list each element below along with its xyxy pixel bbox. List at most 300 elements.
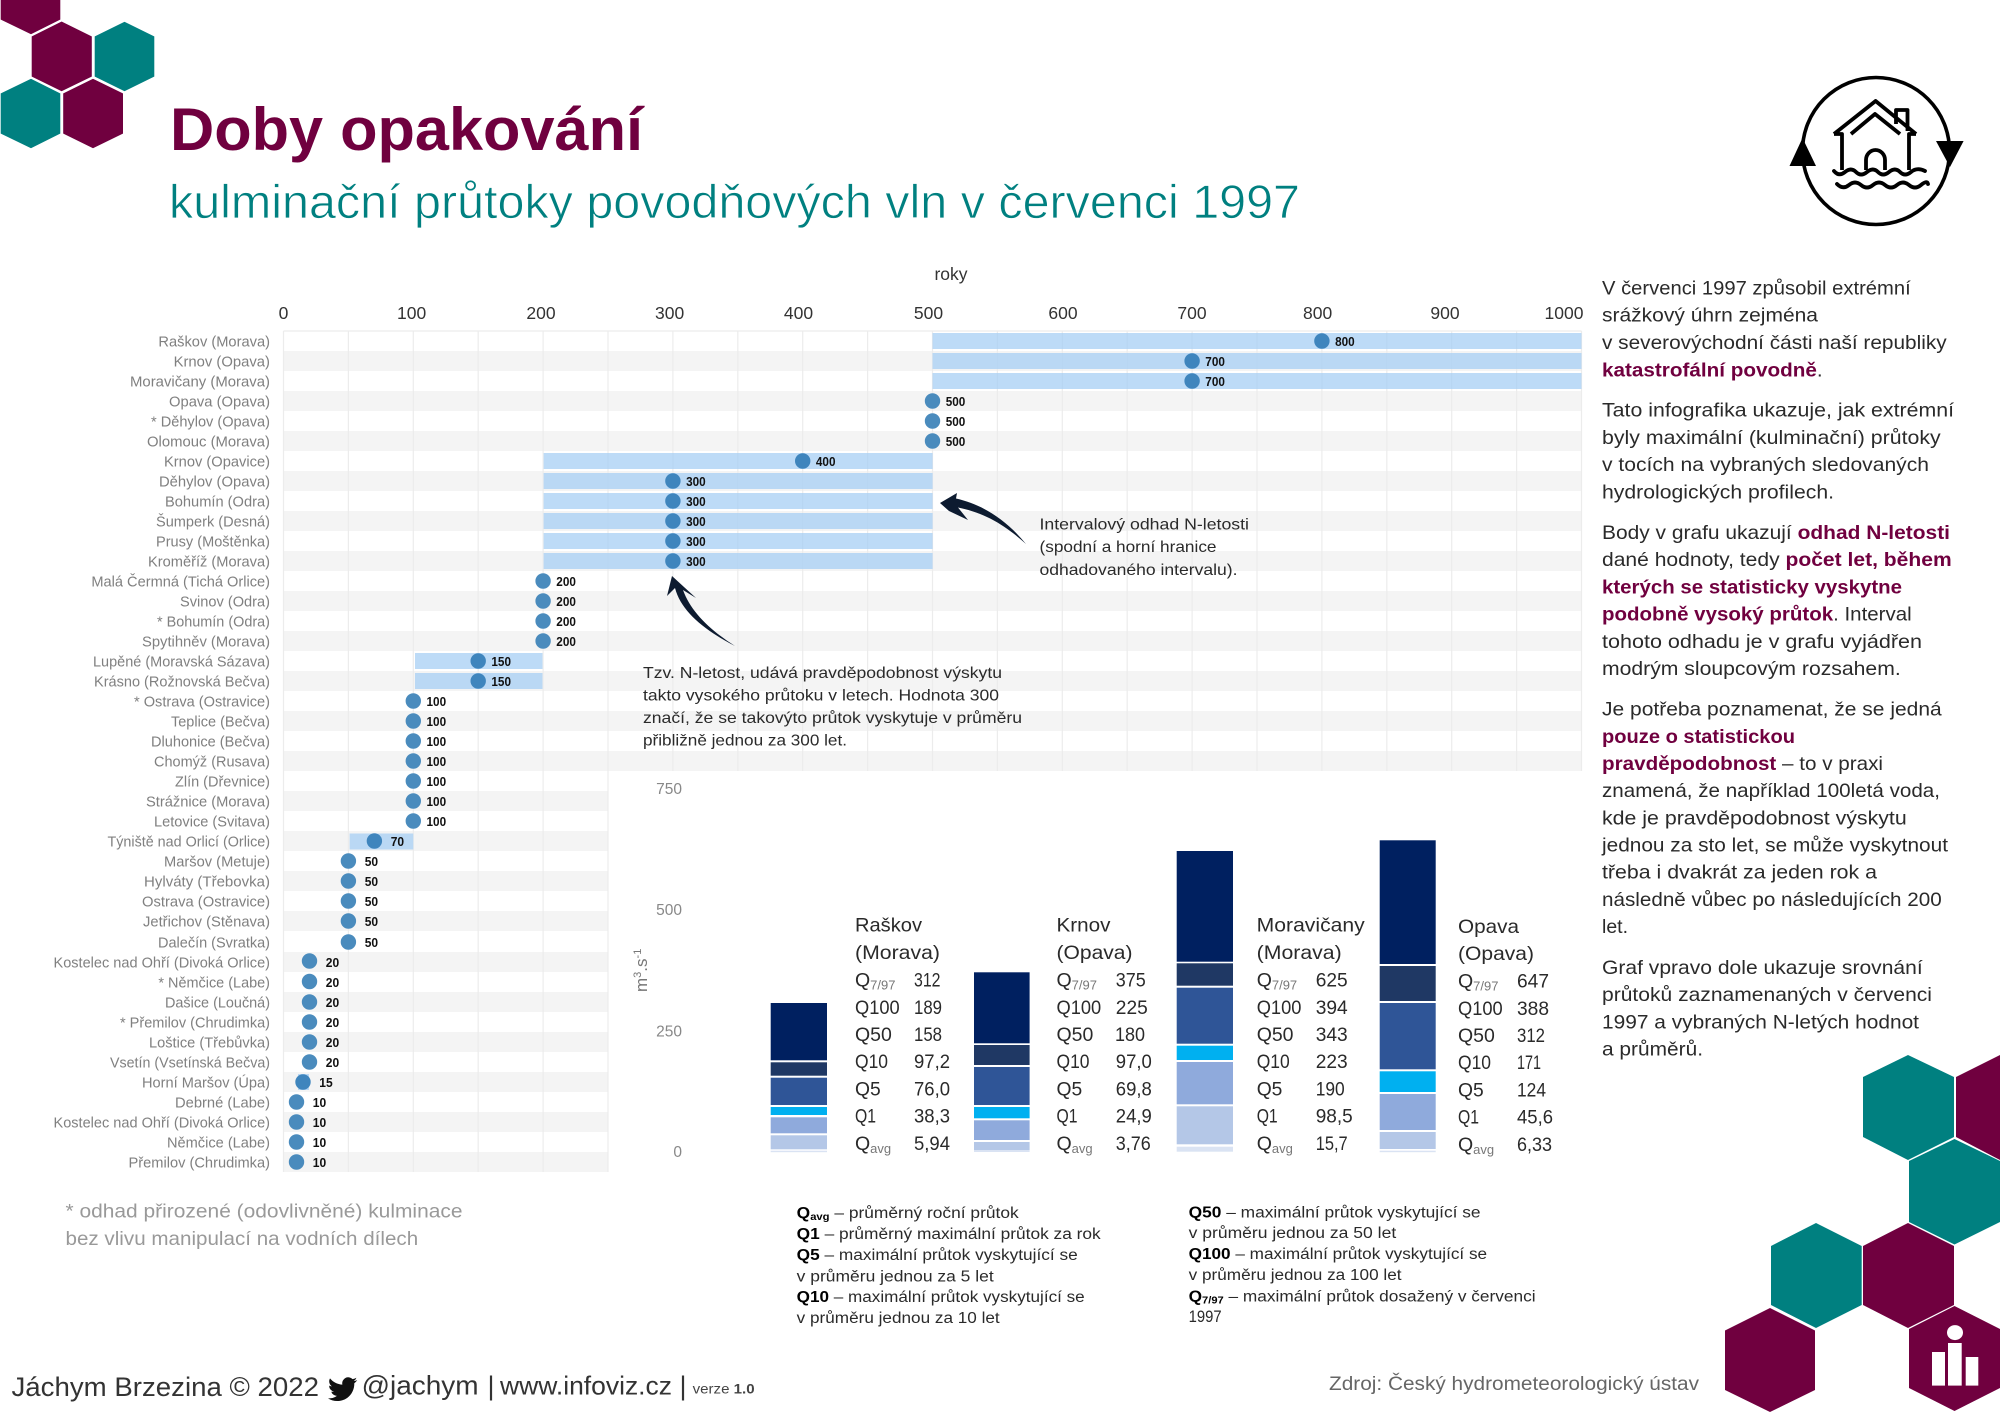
footnote: bez vlivu manipulací na vodních dílech — [66, 1228, 418, 1250]
row: Kostelec nad Ohří (Divoká Orlice): Kostelec nad Ohří (Divoká Orlice) — [54, 956, 270, 972]
row: Teplice (Bečva): Teplice (Bečva) — [171, 714, 270, 730]
row: Vsetín (Vsetínská Bečva): 20 — [326, 1056, 339, 1070]
row: Svinov (Odra): 200 — [556, 595, 576, 609]
row: Vsetín (Vsetínská Bečva) — [110, 1054, 339, 1072]
row: Malá Čermná (Tichá Orlice): Malá Čermná (Tichá Orlice) — [91, 574, 270, 590]
row: Krásno (Rožnovská Bečva): Krásno (Rožnovská Bečva) — [94, 674, 270, 690]
row: * Ostrava (Ostravice) — [134, 693, 446, 710]
paragraph 3: podobně vysoký průtok . Interval — [1602, 604, 1912, 626]
legend: left column: v průměru jednou za 5 let — [797, 1268, 994, 1286]
table: Moravičany values: 625 — [1316, 970, 1348, 992]
annotation: interval estimate: Intervalový odhad N-letosti — [1040, 516, 1249, 534]
table: Opava values: 6,33 — [1517, 1134, 1552, 1156]
table: Raškov values: (Morava) — [855, 942, 940, 964]
row: Týniště nad Orlicí (Orlice): 70 — [391, 835, 404, 849]
row: Bohumín (Odra): Bohumín (Odra) — [165, 494, 270, 510]
row: Strážnice (Morava): Strážnice (Morava) — [146, 794, 270, 810]
table: Raškov values: Q — [855, 1133, 870, 1155]
axis ticks: 500 — [914, 303, 943, 323]
table: Opava values: Q50 — [1458, 1025, 1495, 1047]
axis ticks: 200 — [526, 303, 556, 323]
row: Opava (Opava) — [169, 393, 965, 410]
table: Krnov values: 69,8 — [1116, 1078, 1152, 1100]
row: Dluhonice (Bečva): 100 — [426, 735, 446, 749]
row: Teplice (Bečva): 100 — [426, 715, 446, 729]
row: Přemilov (Chrudimka): 10 — [313, 1156, 326, 1170]
paragraph 4: třeba i dvakrát za jeden rok a — [1602, 862, 1877, 884]
row: Bohumín (Odra) — [165, 493, 933, 510]
chart: stacked bars y axis: 0 — [673, 1144, 682, 1161]
footer: author: verze 1.0 — [693, 1380, 755, 1396]
row: Loštice (Třebůvka) — [149, 1034, 339, 1052]
row: Moravičany (Morava): Moravičany (Morava) — [130, 374, 270, 390]
row: Dašice (Loučná): Dašice (Loučná) — [165, 996, 270, 1012]
row: Děhylov (Opava) — [159, 473, 933, 490]
text block: side explanation — [1601, 277, 1955, 1060]
row: Kostelec nad Ohří (Divoká Orlice): 10 — [313, 1116, 326, 1130]
paragraph 2: byly maximální (kulminační) průtoky — [1602, 427, 1941, 449]
row: Spytihněv (Morava): 200 — [556, 635, 576, 649]
row: Malá Čermná (Tichá Orlice): 200 — [556, 575, 576, 589]
axis unit: m — [632, 978, 651, 992]
row: Kroměříž (Morava): Kroměříž (Morava) — [148, 554, 270, 570]
row: Šumperk (Desná) — [156, 513, 933, 530]
paragraph 3: Body v grafu ukazují odhad N-letosti — [1602, 522, 1950, 544]
axis ticks: 100 — [397, 303, 426, 323]
axis ticks: 800 — [1303, 303, 1332, 323]
row: Horní Maršov (Úpa): 15 — [319, 1076, 333, 1090]
row: Prusy (Moštěnka) — [156, 533, 933, 550]
row: Svinov (Odra) — [180, 593, 576, 610]
footer: author: www.infoviz.cz — [499, 1370, 672, 1400]
table: Raškov values: 5,94 — [914, 1133, 950, 1155]
decoration: hexagons top left — [0, 0, 155, 149]
table: Opava values: Opava — [1458, 916, 1519, 938]
row: Jetřichov (Stěnava) — [143, 913, 378, 930]
footer: source: Zdroj: Český hydrometeorologický ústav — [1329, 1373, 1700, 1395]
row: Dašice (Loučná): 20 — [326, 996, 339, 1010]
paragraph 1: v severovýchodní části naší republiky — [1602, 332, 1947, 354]
row: * Němčice (Labe): * Němčice (Labe) — [158, 976, 270, 992]
row: Šumperk (Desná): 300 — [686, 515, 706, 529]
table: Raškov values: avg — [870, 1141, 891, 1156]
row: Kostelec nad Ohří (Divoká Orlice): 20 — [326, 956, 339, 970]
legend: left column: – průměrný roční průtok — [830, 1205, 1019, 1222]
axis unit: -1 — [632, 949, 644, 958]
table: Moravičany values: 190 — [1316, 1078, 1345, 1100]
row: * Děhylov (Opava): 500 — [946, 415, 965, 429]
table: Opava values: 312 — [1517, 1025, 1545, 1047]
row: Krnov (Opava): Krnov (Opava) — [174, 354, 270, 370]
row: * Bohumín (Odra): * Bohumín (Odra) — [157, 614, 270, 630]
stacked bar: Krnov — [974, 972, 1030, 1152]
row: Prusy (Moštěnka): Prusy (Moštěnka) — [156, 534, 270, 550]
legend: right column: Q50 – maximální průtok vyskytující se — [1189, 1204, 1481, 1222]
paragraph 4: znamená, že například 100letá voda, — [1602, 780, 1940, 802]
table: Opava values: 171 — [1517, 1052, 1541, 1074]
table: Krnov values: 225 — [1116, 997, 1148, 1019]
row: Spytihněv (Morava) — [142, 633, 576, 650]
table: Raškov values: Q — [855, 970, 870, 992]
row: * Děhylov (Opava) — [151, 413, 965, 430]
row: Moravičany (Morava) — [130, 373, 1582, 390]
row: Olomouc (Morava) — [147, 433, 965, 450]
legend: right column: 1997 — [1189, 1308, 1222, 1326]
legend: left column: Q1 – průměrný maximální průtok za rok — [797, 1226, 1101, 1243]
row: Strážnice (Morava) — [146, 793, 446, 810]
row: Strážnice (Morava): 100 — [426, 795, 446, 809]
legend: left column — [797, 1205, 1101, 1327]
row: Zlín (Dřevnice): 100 — [426, 775, 446, 789]
row: Chomýž (Rusava) — [154, 753, 446, 770]
row: Moravičany (Morava): 700 — [1205, 375, 1225, 389]
axis ticks: 600 — [1048, 303, 1078, 323]
footer: author: | — [488, 1371, 495, 1401]
footer: author: | — [680, 1371, 687, 1401]
row: Hylváty (Třebovka) — [144, 873, 378, 890]
table: Moravičany values: Q — [1257, 970, 1272, 992]
table: Moravičany values: Q5 — [1257, 1078, 1283, 1100]
table: Raškov values: 189 — [914, 997, 942, 1019]
table: Opava values: Q5 — [1458, 1080, 1484, 1102]
legend: left column: Q5 – maximální průtok vyskytující se — [797, 1247, 1078, 1264]
row: Opava (Opava): 500 — [946, 395, 965, 409]
annotation: N-year explanation: přibližně jednou za 300 let. — [643, 732, 847, 750]
row: Debrné (Labe): 10 — [313, 1096, 326, 1110]
table: Moravičany values — [1257, 915, 1365, 1156]
row: Děhylov (Opava): 300 — [686, 475, 706, 489]
legend: right column: 7/97 — [1202, 1296, 1224, 1306]
paragraph 5 — [1602, 957, 1932, 1060]
table: Krnov values: 180 — [1115, 1024, 1145, 1046]
paragraph 2: hydrologických profilech. — [1602, 481, 1834, 503]
paragraph 2 — [1602, 400, 1955, 503]
table: Krnov values: Q10 — [1056, 1051, 1090, 1073]
footer: author: Jáchym Brzezina © 2022 — [12, 1372, 319, 1402]
chart: stacked bars y axis: 250 — [656, 1024, 682, 1040]
legend: left column: Q10 – maximální průtok vyskytující se — [797, 1289, 1085, 1306]
annotation: interval estimate: (spodní a horní hranice — [1040, 539, 1217, 556]
axis ticks: 300 — [655, 303, 684, 323]
row: Ostrava (Ostravice): 50 — [365, 895, 378, 909]
table: Moravičany values: avg — [1272, 1141, 1293, 1156]
axis unit: .s — [632, 958, 651, 972]
axis ticks: 0 — [279, 303, 289, 323]
legend: left column: avg — [810, 1212, 830, 1223]
table: Opava values: Q — [1458, 970, 1473, 992]
row: * Ostrava (Ostravice): 100 — [426, 695, 446, 709]
row: Svinov (Odra): Svinov (Odra) — [180, 594, 270, 610]
legend: left column: Q — [797, 1205, 810, 1222]
footer: author: @jachym — [362, 1370, 479, 1400]
row: Hylváty (Třebovka): 50 — [365, 875, 378, 889]
paragraph 5: 1997 a vybraných N-letých hodnot — [1602, 1012, 1920, 1034]
row: Krásno (Rožnovská Bečva) — [94, 673, 542, 690]
row: Horní Maršov (Úpa) — [142, 1074, 333, 1092]
annotation: N-year explanation: značí, že se takovýto průtok vyskytuje v průměru — [643, 709, 1022, 727]
row: Dluhonice (Bečva) — [151, 733, 446, 750]
stacked bar: Moravičany — [1177, 851, 1233, 1152]
table: Moravičany values: Q1 — [1257, 1106, 1278, 1128]
paragraph 3 — [1602, 522, 1952, 680]
row: Horní Maršov (Úpa): Horní Maršov (Úpa) — [142, 1074, 270, 1092]
footnote — [66, 1200, 462, 1250]
row: Šumperk (Desná): Šumperk (Desná) — [156, 514, 270, 530]
paragraph 4: Je potřeba poznamenat, že se jedná — [1602, 699, 1942, 721]
paragraph 4: let. — [1602, 916, 1628, 938]
row: Debrné (Labe): Debrné (Labe) — [175, 1096, 270, 1112]
paragraph 2: v tocích na vybraných sledovaných — [1602, 454, 1929, 476]
table: Raškov values: Raškov — [855, 915, 922, 937]
paragraph 5: průtoků zaznamenaných v červenci — [1602, 984, 1932, 1006]
row: Spytihněv (Morava): Spytihněv (Morava) — [142, 634, 270, 650]
row: Raškov (Morava): 800 — [1335, 335, 1355, 349]
table: Raškov values: Q5 — [855, 1078, 881, 1100]
annotation: N-year explanation: takto vysokého průtoku v letech. Hodnota 300 — [643, 686, 999, 704]
row: * Němčice (Labe): 20 — [326, 976, 339, 990]
row: Maršov (Metuje): 50 — [365, 855, 378, 869]
annotation: interval estimate: odhadovaného intervalu). — [1040, 562, 1238, 579]
row: Krnov (Opavice): 400 — [816, 455, 836, 469]
row: Krnov (Opavice): Krnov (Opavice) — [164, 454, 270, 470]
table: Raškov values: Q10 — [855, 1051, 888, 1073]
row: Lupěné (Moravská Sázava) — [93, 653, 542, 670]
footnote: * odhad přirozené (odovlivněné) kulminace — [66, 1200, 462, 1222]
table: Krnov values: 7/97 — [1072, 978, 1097, 992]
table: Raškov values: Q50 — [855, 1024, 892, 1046]
table: Opava values: 124 — [1517, 1080, 1546, 1102]
paragraph 5: Graf vpravo dole ukazuje srovnání — [1602, 957, 1923, 979]
table: Moravičany values: (Morava) — [1257, 942, 1342, 964]
table: Krnov values: Q — [1056, 970, 1072, 992]
row: Němčice (Labe) — [167, 1134, 326, 1152]
row: Dalečín (Svratka): Dalečín (Svratka) — [158, 936, 270, 952]
legend: right column: Q — [1189, 1288, 1202, 1306]
row: Letovice (Svitava): Letovice (Svitava) — [154, 814, 270, 830]
row: Krásno (Rožnovská Bečva): 150 — [491, 675, 511, 689]
row: Maršov (Metuje) — [164, 853, 378, 870]
chart: N-year dot plot — [54, 264, 1584, 1172]
chart: stacked bars y axis — [632, 781, 682, 1161]
paragraph 3: dané hodnoty, tedy počet let, během — [1602, 549, 1952, 571]
stacked bar: Opava — [1380, 840, 1436, 1152]
title: Doby opakování — [170, 96, 645, 163]
table: Moravičany values: 343 — [1316, 1024, 1348, 1046]
axis ticks: 900 — [1430, 303, 1460, 323]
table: Opava values — [1458, 916, 1553, 1157]
table: Krnov values: 3,76 — [1116, 1133, 1151, 1155]
paragraph 4: následně vůbec po následujících 200 — [1602, 889, 1942, 911]
icon: twitter bird — [328, 1377, 357, 1401]
paragraph 3: modrým sloupcovým rozsahem. — [1602, 658, 1901, 680]
table: Krnov values: Q — [1056, 1133, 1072, 1155]
row: Dašice (Loučná) — [165, 994, 339, 1012]
paragraph 3: tohoto odhadu je v grafu vyjádřen — [1602, 631, 1922, 653]
paragraph 1 — [1602, 277, 1947, 381]
table: Krnov values: 375 — [1116, 970, 1146, 992]
paragraph 4: pravděpodobnost – to v praxi — [1602, 753, 1883, 775]
row: * Přemilov (Chrudimka) — [120, 1014, 339, 1032]
arrow: to dot — [667, 576, 735, 646]
row: Bohumín (Odra): 300 — [686, 495, 706, 509]
table: Krnov values — [1056, 915, 1152, 1156]
paragraph 4 — [1601, 699, 1949, 938]
table: Moravičany values: 98,5 — [1316, 1106, 1353, 1128]
paragraph 5: a průměrů. — [1602, 1038, 1703, 1060]
row: Týniště nad Orlicí (Orlice) — [108, 833, 413, 850]
row: Loštice (Třebůvka): 20 — [326, 1036, 339, 1050]
row: Teplice (Bečva) — [171, 713, 446, 730]
legend: right column — [1189, 1204, 1536, 1326]
legend: right column: – maximální průtok dosažený v červenci — [1224, 1288, 1536, 1306]
table: Moravičany values: 223 — [1316, 1051, 1348, 1073]
row: * Děhylov (Opava): * Děhylov (Opava) — [151, 414, 270, 430]
annotation: interval estimate — [1040, 516, 1249, 579]
row: Chomýž (Rusava): Chomýž (Rusava) — [154, 754, 270, 770]
row: Raškov (Morava) — [158, 333, 1581, 350]
table: Krnov values: Q5 — [1056, 1078, 1082, 1100]
table: Opava values: 647 — [1517, 970, 1549, 992]
table: Opava values: Q — [1458, 1134, 1473, 1156]
table: Krnov values: 97,0 — [1116, 1051, 1152, 1073]
row: Dalečín (Svratka) — [158, 934, 378, 952]
row: Lupěné (Moravská Sázava): 150 — [491, 655, 511, 669]
row: * Ostrava (Ostravice): * Ostrava (Ostravice) — [134, 694, 270, 710]
table: Opava values: Q100 — [1458, 998, 1503, 1020]
annotation: N-year explanation — [643, 665, 1022, 750]
row: * Bohumín (Odra) — [157, 613, 576, 630]
table: Raškov values: Q100 — [855, 997, 900, 1019]
table: Moravičany values: 15,7 — [1316, 1133, 1348, 1155]
row: Děhylov (Opava): Děhylov (Opava) — [159, 474, 270, 490]
subtitle: kulminační průtoky povodňových vln v červenci 1997 — [169, 175, 1300, 228]
legend: left column: v průměru jednou za 10 let — [797, 1310, 1000, 1327]
paragraph 1: srážkový úhrn zejména — [1602, 304, 1818, 326]
table: Opava values: (Opava) — [1458, 943, 1534, 965]
axis ticks — [279, 303, 1584, 323]
annotation: N-year explanation: Tzv. N-letost, udává pravděpodobnost výskytu — [643, 665, 1002, 682]
row: * Bohumín (Odra): 200 — [556, 615, 576, 629]
row: Kostelec nad Ohří (Divoká Orlice) — [54, 953, 339, 972]
row: * Němčice (Labe) — [158, 974, 339, 992]
row: Lupěné (Moravská Sázava): Lupěné (Moravská Sázava) — [93, 654, 270, 670]
table: Opava values: 388 — [1517, 998, 1549, 1020]
table: Krnov values: Q100 — [1056, 997, 1101, 1019]
row: Zlín (Dřevnice) — [175, 773, 446, 790]
row: Krnov (Opava): 700 — [1205, 355, 1225, 369]
row: Dluhonice (Bečva): Dluhonice (Bečva) — [151, 734, 270, 750]
table: Raškov values: Q1 — [855, 1106, 876, 1128]
paragraph 2: Tato infografika ukazuje, jak extrémní — [1602, 400, 1955, 422]
table: Krnov values: avg — [1072, 1141, 1093, 1156]
row: Letovice (Svitava) — [154, 813, 446, 830]
row: Chomýž (Rusava): 100 — [426, 755, 446, 769]
row: * Přemilov (Chrudimka): * Přemilov (Chrudimka) — [120, 1016, 270, 1032]
axis ticks: 1000 — [1545, 303, 1584, 323]
row: Olomouc (Morava): 500 — [946, 435, 965, 449]
table: Opava values: Q1 — [1458, 1106, 1479, 1128]
row: Letovice (Svitava): 100 — [426, 815, 446, 829]
row: Ostrava (Ostravice) — [142, 893, 378, 910]
table: Raškov values: 312 — [914, 970, 940, 992]
table: Krnov values: Q1 — [1056, 1106, 1078, 1128]
table: Raškov values: 7/97 — [870, 978, 895, 992]
row: Opava (Opava): Opava (Opava) — [169, 394, 270, 410]
stacked bar: Raškov — [771, 1003, 827, 1152]
row: Přemilov (Chrudimka) — [128, 1154, 326, 1172]
row: Malá Čermná (Tichá Orlice) — [91, 573, 576, 590]
row: Kostelec nad Ohří (Divoká Orlice): Kostelec nad Ohří (Divoká Orlice) — [54, 1116, 270, 1132]
row: Přemilov (Chrudimka): Přemilov (Chrudimka) — [128, 1156, 270, 1172]
legend: right column: v průměru jednou za 100 let — [1189, 1267, 1402, 1284]
row: Ostrava (Ostravice): Ostrava (Ostravice) — [142, 894, 270, 910]
row: Hylváty (Třebovka): Hylváty (Třebovka) — [144, 874, 270, 890]
table: Moravičany values: Q — [1257, 1133, 1272, 1155]
row: Debrné (Labe) — [175, 1094, 326, 1112]
table: Krnov values: (Opava) — [1056, 942, 1132, 964]
row: Jetřichov (Stěnava): Jetřichov (Stěnava) — [143, 914, 270, 930]
table: Opava values: avg — [1473, 1142, 1494, 1157]
table: Moravičany values: Q10 — [1257, 1051, 1290, 1073]
table: Krnov values: 24,9 — [1116, 1106, 1152, 1128]
row: Prusy (Moštěnka): 300 — [686, 535, 706, 549]
paragraph 1: katastrofální povodně . — [1602, 359, 1823, 381]
row: Zlín (Dřevnice): Zlín (Dřevnice) — [175, 774, 270, 790]
row: Dalečín (Svratka): 50 — [365, 936, 378, 950]
paragraph 4: kde je pravděpodobnost výskytu — [1602, 808, 1907, 830]
row: Raškov (Morava): Raškov (Morava) — [158, 334, 270, 350]
axis unit: 3 — [632, 972, 644, 978]
legend: right column: Q100 – maximální průtok vyskytující se — [1189, 1246, 1487, 1263]
row: Týniště nad Orlicí (Orlice): Týniště nad Orlicí (Orlice) — [108, 834, 270, 850]
table: Raškov values: 38,3 — [914, 1106, 950, 1128]
axis title: roky: roky — [934, 264, 968, 284]
row: * Přemilov (Chrudimka): 20 — [326, 1016, 339, 1030]
row: Kroměříž (Morava) — [148, 553, 933, 570]
table: Opava values: Q10 — [1458, 1052, 1491, 1074]
table: Krnov values: Krnov — [1056, 915, 1111, 937]
paragraph 4: jednou za sto let, se může vyskytnout — [1601, 835, 1949, 857]
footer: author — [12, 1370, 755, 1402]
legend: right column: v průměru jednou za 50 let — [1189, 1225, 1397, 1242]
axis ticks: 400 — [784, 303, 813, 323]
table: Raškov values: 97,2 — [914, 1051, 950, 1073]
row: Krnov (Opavice) — [164, 453, 933, 470]
table: Opava values: 45,6 — [1517, 1106, 1553, 1128]
table: Moravičany values: Q100 — [1257, 997, 1302, 1019]
paragraph 4: pouze o statistickou — [1602, 726, 1795, 748]
chart: stacked bars y axis: 750 — [656, 781, 682, 798]
row: Vsetín (Vsetínská Bečva): Vsetín (Vsetínská Bečva) — [110, 1056, 270, 1072]
row: Jetřichov (Stěnava): 50 — [365, 915, 378, 929]
row: Krnov (Opava) — [174, 353, 1582, 370]
row: Němčice (Labe): Němčice (Labe) — [167, 1136, 270, 1152]
chart: stacked bars y axis: 500 — [656, 902, 682, 919]
decoration: hexagons bottom right — [1725, 1055, 2000, 1412]
table: Moravičany values: Q50 — [1257, 1024, 1294, 1046]
row: Maršov (Metuje): Maršov (Metuje) — [164, 854, 270, 870]
paragraph 3: kterých se statisticky vyskytne — [1602, 576, 1902, 598]
row: Olomouc (Morava): Olomouc (Morava) — [147, 434, 270, 450]
table: Opava values: 7/97 — [1473, 978, 1498, 994]
table: Raškov values — [855, 915, 950, 1156]
table: Moravičany values: 7/97 — [1272, 978, 1297, 992]
table: Krnov values: Q50 — [1056, 1024, 1093, 1046]
icon: flooded house with cycle arrows — [1790, 78, 1964, 224]
arrow: to interval bar — [940, 493, 1026, 544]
axis ticks: 700 — [1177, 303, 1207, 323]
table: Moravičany values: Moravičany — [1257, 915, 1365, 937]
